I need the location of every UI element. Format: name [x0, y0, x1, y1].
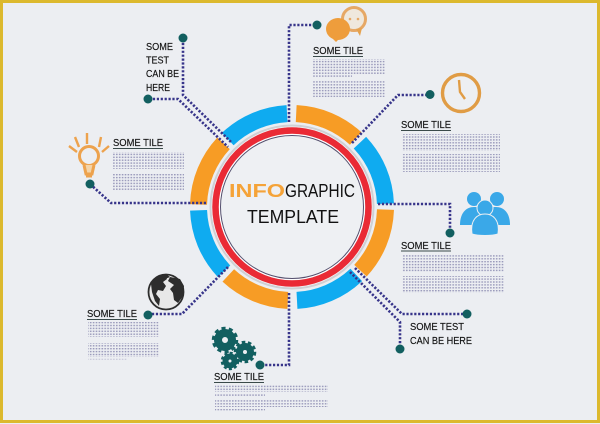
icon: globe	[148, 274, 184, 310]
text: some test can be here: SOME TEST	[410, 321, 465, 333]
title: GRAPHIC	[285, 181, 355, 201]
text: some test can be here	[410, 321, 472, 347]
icon: chat bubbles	[326, 8, 366, 42]
text: some test can be here	[146, 41, 179, 94]
title: INFO	[229, 181, 285, 201]
text block: top: SOME TILE	[313, 45, 363, 57]
text block: left	[113, 137, 184, 191]
text: some test can be here: TEST	[146, 54, 169, 66]
connector: globe	[144, 267, 228, 320]
text block: left: SOME TILE	[113, 137, 163, 149]
connector: clock	[352, 90, 434, 143]
icon: gears	[214, 328, 255, 369]
connector: bulb	[86, 180, 206, 203]
connector: people	[378, 204, 454, 238]
text block: top	[313, 45, 385, 97]
ring segments	[160, 75, 424, 339]
connector: gears	[256, 293, 289, 370]
text: some test can be here: SOME	[146, 41, 173, 53]
text block: right: SOME TILE	[401, 240, 451, 252]
text block: lower left: SOME TILE	[87, 308, 137, 320]
central ring diagram	[160, 75, 424, 339]
title	[229, 181, 355, 227]
text block: bottom	[214, 371, 328, 411]
icon: light bulb	[69, 133, 109, 176]
central red circle	[210, 124, 374, 290]
text: some test can be here: CAN BE HERE	[410, 335, 472, 347]
text block: bottom: SOME TILE	[214, 371, 264, 383]
text block: right	[401, 240, 504, 293]
text: some test can be here: CAN BE	[146, 68, 179, 80]
connector: lower right	[350, 268, 472, 354]
icon: clock	[442, 74, 480, 112]
title: TEMPLATE	[247, 207, 339, 227]
text block: upper right	[401, 119, 500, 172]
text: some test can be here: HERE	[146, 82, 170, 94]
text block: upper right: SOME TILE	[401, 119, 451, 131]
icon: people	[460, 192, 510, 236]
text block: lower left	[87, 308, 159, 360]
connector: top chat	[289, 20, 322, 122]
connector: upper left	[144, 34, 232, 147]
